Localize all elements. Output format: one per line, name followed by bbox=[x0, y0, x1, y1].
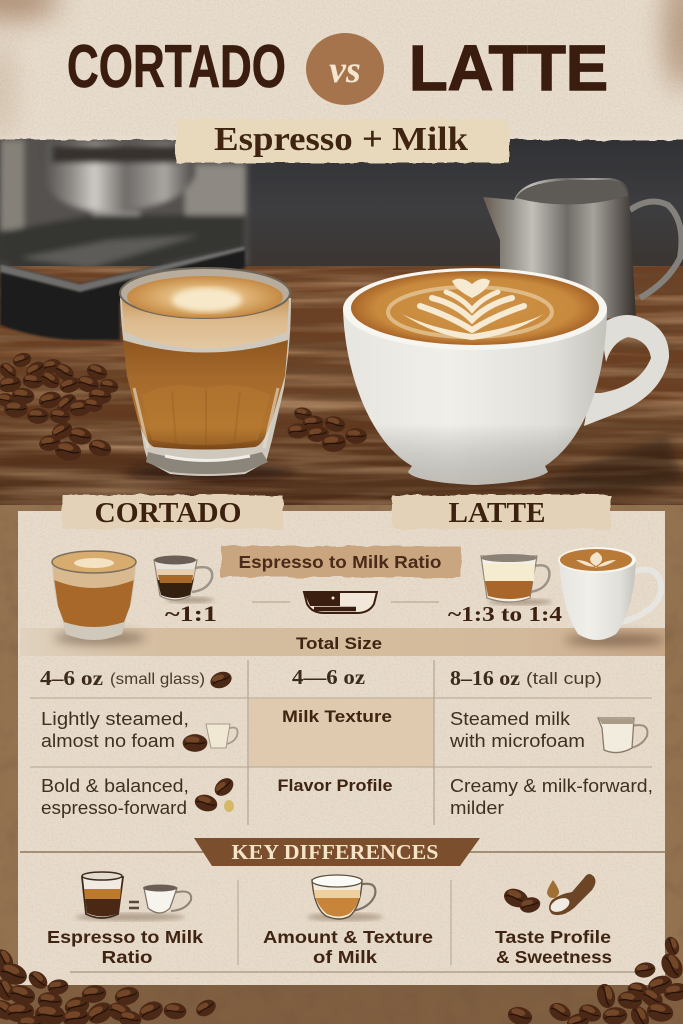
tag: cortado: CORTADO bbox=[94, 498, 242, 529]
coffee beans bottom right bbox=[506, 935, 683, 1024]
icon: small cortado glass bbox=[52, 551, 146, 645]
row: texture latte bbox=[449, 709, 647, 753]
machine base bbox=[0, 246, 245, 340]
bottom panel edge bbox=[70, 971, 640, 973]
divider bbox=[237, 880, 239, 965]
tag: cortado bbox=[62, 495, 283, 529]
icon: bean and milk glass bbox=[183, 724, 238, 752]
row: texture cortado: Lightly steamed, bbox=[41, 709, 189, 729]
key difference: ratio bbox=[47, 872, 203, 967]
row: texture latte: with microfoam bbox=[449, 731, 585, 751]
row: flavor cortado: Bold & balanced, bbox=[41, 776, 189, 796]
key difference: taste: & Sweetness bbox=[496, 947, 612, 967]
row: flavor latte: Creamy & milk-forward, bbox=[450, 776, 653, 796]
icon: beans drop spoon bbox=[501, 874, 596, 915]
photo scene: coffee bar bbox=[0, 130, 683, 506]
row: size latte: 8–16 oz bbox=[450, 666, 520, 690]
coffee beans centre on table bbox=[287, 406, 367, 453]
row: texture cortado: almost no foam bbox=[41, 731, 175, 751]
row: flavor label: Flavor Profile bbox=[278, 777, 392, 795]
total size band: Total Size bbox=[296, 634, 382, 653]
icon: layered cup bbox=[307, 875, 383, 921]
key difference: milk bbox=[263, 875, 433, 967]
milk pitcher bbox=[483, 178, 682, 318]
label: espresso to milk ratio bbox=[221, 546, 461, 577]
title word: latte: LATTE bbox=[409, 32, 608, 104]
latte art bbox=[388, 279, 552, 340]
ratio text: latte: ~1:3 to 1:4 bbox=[448, 602, 563, 626]
badge: vs: vs bbox=[329, 49, 361, 91]
comparison panel paper bbox=[0, 505, 683, 1024]
coffee beans left on table bbox=[0, 350, 120, 463]
row: size cortado bbox=[40, 666, 234, 691]
icon: latte ratio cup bbox=[481, 554, 552, 605]
ratio text: cortado: ~1:1 bbox=[165, 601, 217, 626]
icon: white latte mug bbox=[558, 547, 665, 646]
table bbox=[0, 266, 683, 506]
key difference: taste bbox=[495, 874, 612, 967]
title word: cortado: CORTADO bbox=[67, 33, 286, 100]
icon: beans and nut bbox=[193, 775, 237, 814]
wall bbox=[0, 130, 683, 280]
key differences heading bbox=[20, 838, 665, 866]
row: flavor cortado bbox=[41, 775, 237, 818]
icon: cortado ratio cup bbox=[154, 556, 214, 603]
latte cup bbox=[343, 268, 683, 493]
banner: espresso + milk bbox=[176, 119, 509, 163]
row: size latte bbox=[450, 666, 602, 690]
divider bbox=[450, 880, 452, 965]
header paper bbox=[0, 0, 683, 140]
key difference: ratio: Ratio bbox=[102, 947, 152, 967]
key difference: taste: Taste Profile bbox=[495, 927, 611, 947]
coffee beans bottom left bbox=[0, 946, 219, 1024]
banner: espresso + milk: Espresso + Milk bbox=[214, 121, 468, 158]
cup handle bbox=[584, 315, 669, 426]
key differences heading: KEY DIFFERENCES bbox=[232, 840, 438, 864]
row: texture latte: Steamed milk bbox=[450, 709, 571, 729]
small dash right bbox=[391, 601, 439, 603]
row: flavor latte bbox=[450, 776, 653, 818]
label: espresso to milk ratio: Espresso to Milk Ratio bbox=[238, 552, 442, 572]
row: texture cortado bbox=[41, 709, 238, 752]
icon: shot glass equals cup bbox=[75, 872, 191, 921]
title bbox=[67, 32, 608, 105]
row: flavor cortado: espresso-forward bbox=[41, 798, 187, 818]
row: size cortado: (small glass) bbox=[110, 671, 205, 688]
row: texture label: Milk Texture bbox=[282, 708, 392, 726]
table bbox=[30, 660, 653, 825]
tag: latte: LATTE bbox=[448, 498, 546, 529]
key difference: milk: Amount & Texture bbox=[263, 927, 433, 947]
cortado glass bbox=[120, 268, 295, 481]
tag: latte bbox=[392, 495, 611, 529]
icon: milk pitcher bbox=[598, 718, 647, 753]
milk texture shaded cell bbox=[249, 699, 434, 767]
row: size cortado: 4–6 oz bbox=[40, 666, 103, 690]
key difference: milk: of Milk bbox=[313, 947, 377, 967]
badge: vs bbox=[306, 33, 384, 105]
small dash left bbox=[252, 601, 290, 603]
row: size centre: 4—6 oz bbox=[292, 665, 365, 689]
espresso machine bbox=[0, 135, 248, 280]
icon: half cup ratio bbox=[304, 592, 377, 613]
key difference: ratio: Espresso to Milk bbox=[47, 927, 203, 947]
row: flavor latte: milder bbox=[450, 798, 504, 818]
row: size latte: (tall cup) bbox=[526, 669, 602, 688]
total size band bbox=[20, 628, 665, 656]
